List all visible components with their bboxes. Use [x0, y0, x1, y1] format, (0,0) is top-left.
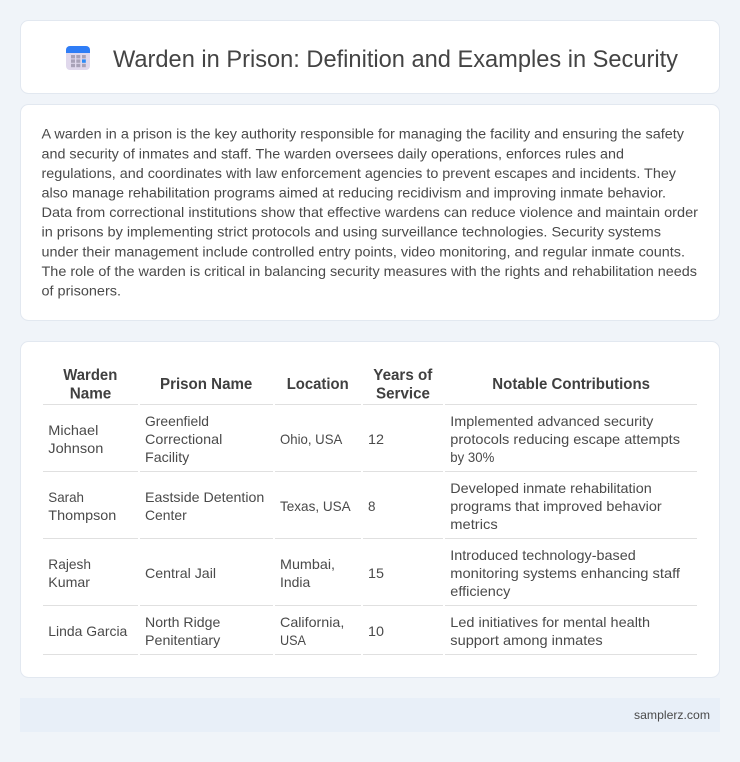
description paragraph: and security of inmates and staff. The warden oversees daily operations, enforces rules and: [42, 145, 624, 161]
table header row: Name: [70, 385, 111, 402]
table row: Michael Johnson: Correctional: [145, 431, 222, 447]
table row: Linda Garcia: support among inmates: [450, 632, 603, 648]
table header row: Notable Contributions: [492, 376, 650, 393]
table row: Linda Garcia: 10: [368, 623, 384, 639]
table row: Rajesh Kumar: Rajesh: [48, 556, 91, 572]
table row: Michael Johnson: by 30%: [450, 449, 494, 465]
table row: Michael Johnson: Michael: [48, 422, 98, 438]
panel: wardens table: [20, 342, 720, 678]
table row: Sarah Thompson: Texas, USA: [280, 498, 351, 514]
title: Warden in Prison: Definition and Examples in Security: [113, 46, 678, 73]
table row: Rajesh Kumar: India: [280, 574, 311, 590]
table row: Rajesh Kumar: monitoring systems enhancing staff: [450, 565, 680, 581]
table row: Linda Garcia: California,: [280, 614, 344, 630]
table row: Linda Garcia: [48, 614, 650, 648]
table row: Linda Garcia: USA: [280, 632, 307, 648]
description paragraph: in prisons by implementing strict protocols and using surveillance technologies. Security systems: [42, 224, 661, 240]
table row: Sarah Thompson: Thompson: [48, 507, 116, 523]
description paragraph: regulations, and coordinates with law enforcement agencies to prevent escapes and incidents. They: [42, 165, 676, 181]
table row: Sarah Thompson: Eastside Detention: [145, 489, 264, 505]
table header row: Service: [376, 385, 430, 402]
description paragraph: under their management include controlled entry points, video monitoring, and regular inmate counts.: [42, 243, 685, 259]
table row: Michael Johnson: protocols reducing escape attempts: [450, 431, 680, 447]
table row: Michael Johnson: Greenfield: [145, 413, 209, 429]
table row: Sarah Thompson: Center: [145, 507, 187, 523]
panel: title header: [20, 20, 720, 94]
table row: Sarah Thompson: [48, 480, 662, 532]
table row: Sarah Thompson: Developed inmate rehabilitation: [450, 480, 652, 496]
description paragraph: A warden in a prison is the key authority responsible for managing the facility and ensuring the safety: [42, 126, 684, 142]
table row: Rajesh Kumar: efficiency: [450, 583, 510, 599]
table header row: [63, 367, 650, 402]
table row: Rajesh Kumar: Mumbai,: [280, 556, 335, 572]
table row: Sarah Thompson: Sarah: [48, 489, 84, 505]
description paragraph: The role of the warden is critical in balancing security measures with the rights and rehabilitation needs: [42, 263, 697, 279]
footer bar: [20, 698, 720, 732]
icon: calendar: [66, 46, 90, 70]
table row: Michael Johnson: [48, 413, 680, 465]
table header row: Location: [287, 376, 349, 393]
table row: Linda Garcia: Led initiatives for mental health: [450, 614, 650, 630]
table row: Michael Johnson: Facility: [145, 449, 189, 465]
description paragraph: also manage rehabilitation programs aimed at reducing recidivism and improving inmate behavior.: [42, 184, 666, 200]
table header row: Years of: [373, 367, 433, 384]
table row: Sarah Thompson: programs that improved behavior: [450, 498, 662, 514]
table header row: Warden: [63, 367, 117, 384]
table header row: Prison Name: [160, 376, 252, 393]
table row: Michael Johnson: Implemented advanced security: [450, 413, 653, 429]
description paragraph: [42, 126, 698, 298]
table row: Linda Garcia: Linda Garcia: [48, 623, 128, 639]
table row: Linda Garcia: Penitentiary: [145, 632, 220, 648]
description paragraph: Data from correctional institutions show that effective wardens can reduce violence and maintain order: [42, 204, 698, 220]
table row: Sarah Thompson: 8: [368, 498, 376, 514]
table row: Michael Johnson: Ohio, USA: [280, 431, 343, 447]
footer source text: samplerz.com: [634, 708, 710, 722]
table row: Rajesh Kumar: Central Jail: [145, 565, 216, 581]
table row: Michael Johnson: Johnson: [48, 440, 103, 456]
table row: Michael Johnson: 12: [368, 431, 384, 447]
table row: Rajesh Kumar: [48, 547, 680, 599]
panel: description: [20, 104, 720, 320]
description paragraph: of prisoners.: [42, 282, 121, 298]
table row: Sarah Thompson: metrics: [450, 516, 498, 532]
table row: Rajesh Kumar: Introduced technology-based: [450, 547, 636, 563]
table row: Rajesh Kumar: Kumar: [48, 574, 90, 590]
table row: Rajesh Kumar: 15: [368, 565, 384, 581]
table row: Linda Garcia: North Ridge: [145, 614, 221, 630]
